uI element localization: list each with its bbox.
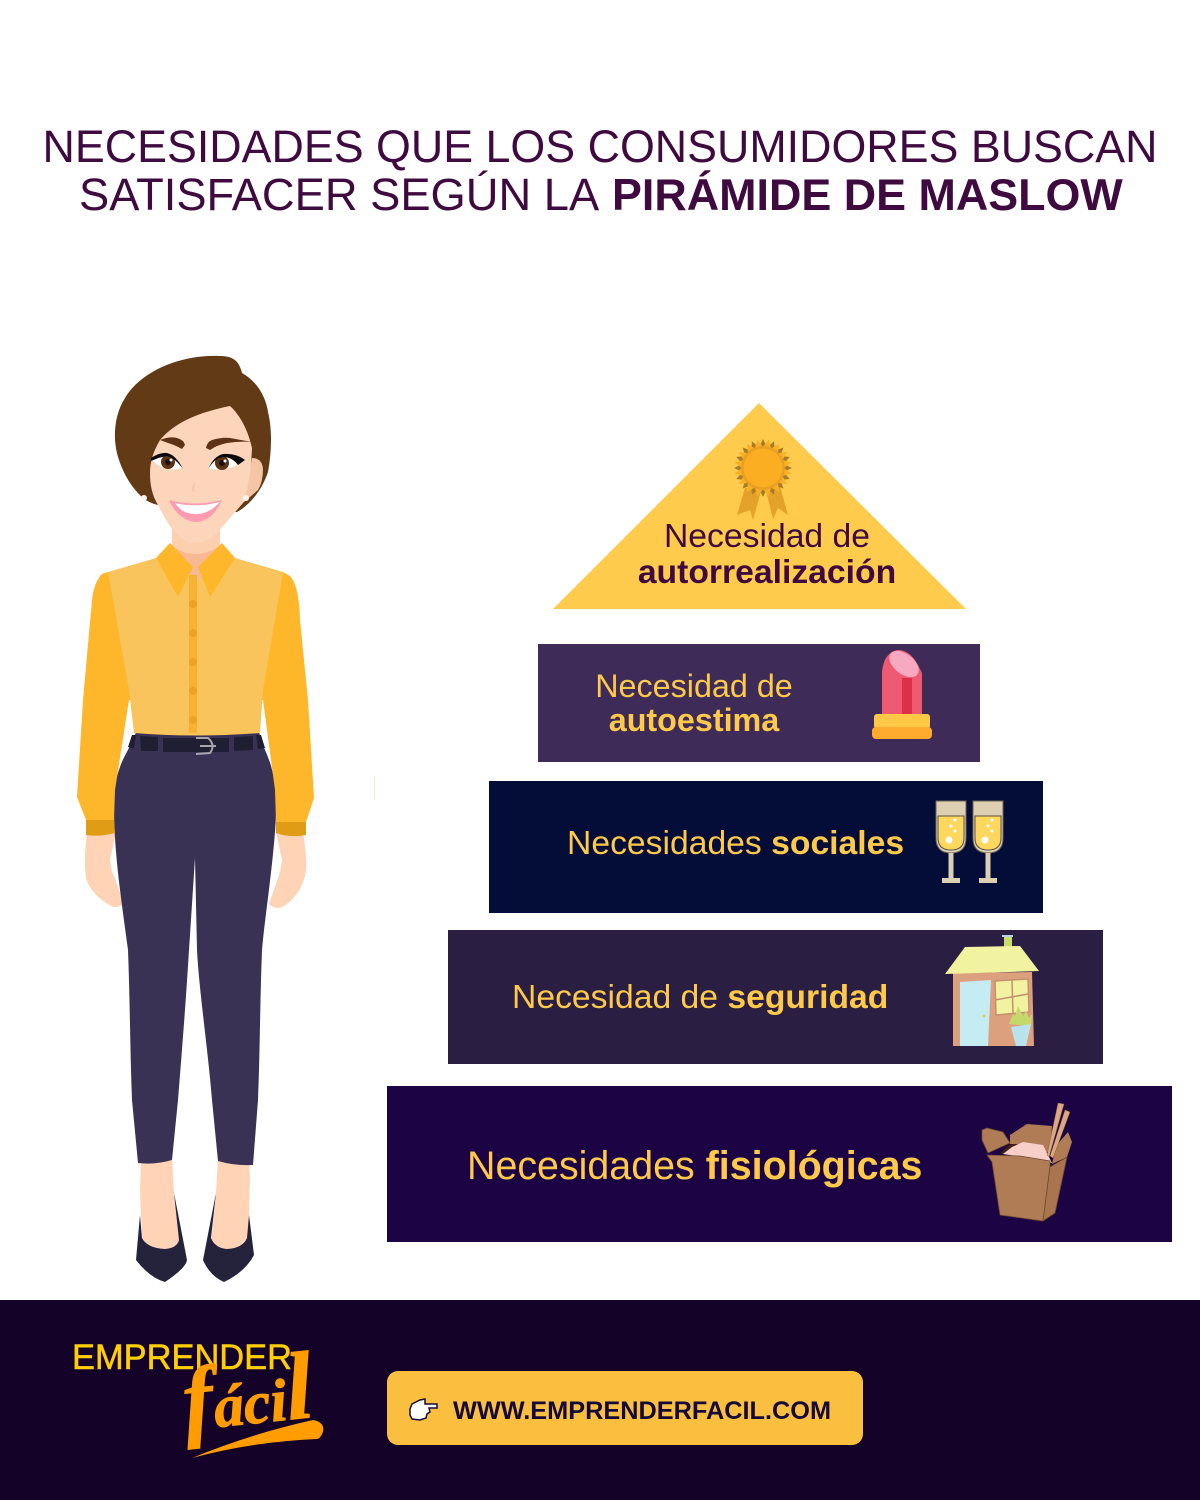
pyramid level: autorrealización (553, 403, 966, 609)
hair (115, 356, 271, 512)
label (638, 517, 896, 591)
mouth (169, 500, 222, 522)
icon: pointing hand (410, 1399, 437, 1420)
label: autoestima (609, 702, 780, 738)
label: Necesidades fisiológicas (467, 1144, 922, 1188)
illustration: woman (77, 356, 314, 1282)
pyramid level: sociales (489, 781, 1043, 913)
label: Necesidad de (664, 517, 870, 555)
label: autorrealización (638, 553, 896, 591)
pyramid level: seguridad (448, 930, 1103, 1064)
title (42, 121, 1158, 220)
icon: lipstick (872, 646, 932, 739)
title: SATISFACER SEGÚN LA (79, 169, 597, 220)
footer (0, 1300, 1200, 1500)
icon: medal (729, 434, 797, 520)
label: Necesidades sociales (567, 824, 904, 862)
button (387, 1371, 863, 1445)
collar (156, 543, 235, 597)
title: PIRÁMIDE DE MASLOW (612, 169, 1123, 220)
icon: noodle box (982, 1103, 1072, 1221)
shirt (108, 558, 283, 736)
pyramid level: fisiológicas (387, 1086, 1172, 1242)
logo (72, 1331, 323, 1458)
neck (170, 520, 222, 585)
eyes (151, 453, 245, 470)
feet (140, 1158, 250, 1251)
url: WWW.EMPRENDERFACIL.COM (453, 1397, 831, 1425)
logo: EMPRENDER (72, 1338, 292, 1377)
logo: fácil (177, 1331, 318, 1451)
trousers (114, 732, 276, 1165)
icon: house (945, 935, 1039, 1046)
label: Necesidad de seguridad (512, 978, 888, 1016)
nose (192, 482, 196, 492)
title: NECESIDADES QUE LOS CONSUMIDORES BUSCAN (42, 121, 1158, 172)
pyramid level: autoestima (538, 644, 980, 762)
earrings (141, 495, 249, 501)
label (595, 668, 793, 738)
pale mark (374, 776, 375, 800)
icon: champagne glasses (936, 801, 1003, 883)
sleeves (77, 572, 314, 822)
buttons (189, 600, 197, 724)
label: Necesidad de (595, 668, 793, 704)
hands (85, 832, 306, 908)
shoes (136, 1193, 254, 1282)
cuffs (86, 820, 306, 836)
face (150, 406, 252, 543)
ear (243, 458, 263, 503)
placket (189, 575, 197, 733)
belt (128, 735, 265, 754)
eyebrows (160, 437, 252, 450)
